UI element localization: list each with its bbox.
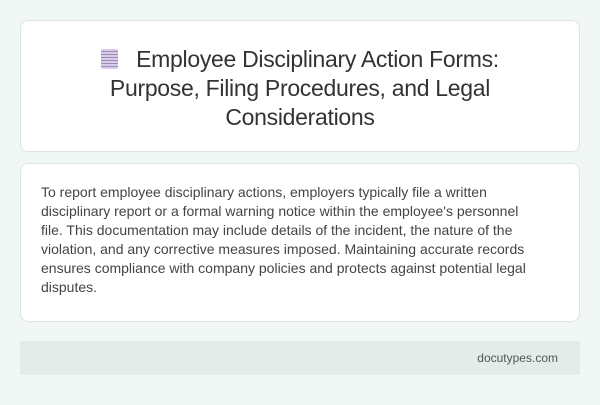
content card [20,163,580,322]
title card [20,20,580,152]
body text: To report employee disciplinary actions, employers typically file a written disciplinary report or a formal warning notice within the employee's personnel file. This documentation may include details of the incident, the nature of the violation, and any corrective measures imposed. Maintaining accurate records ensures compliance with company policies and protects against potential legal disputes. [41,184,526,295]
title: Employee Disciplinary Action Forms: Purpose, Filing Procedures, and Legal Considerations [110,46,499,130]
icon: document [101,49,118,69]
footer bar [20,341,580,375]
footer text: docutypes.com [477,351,558,365]
